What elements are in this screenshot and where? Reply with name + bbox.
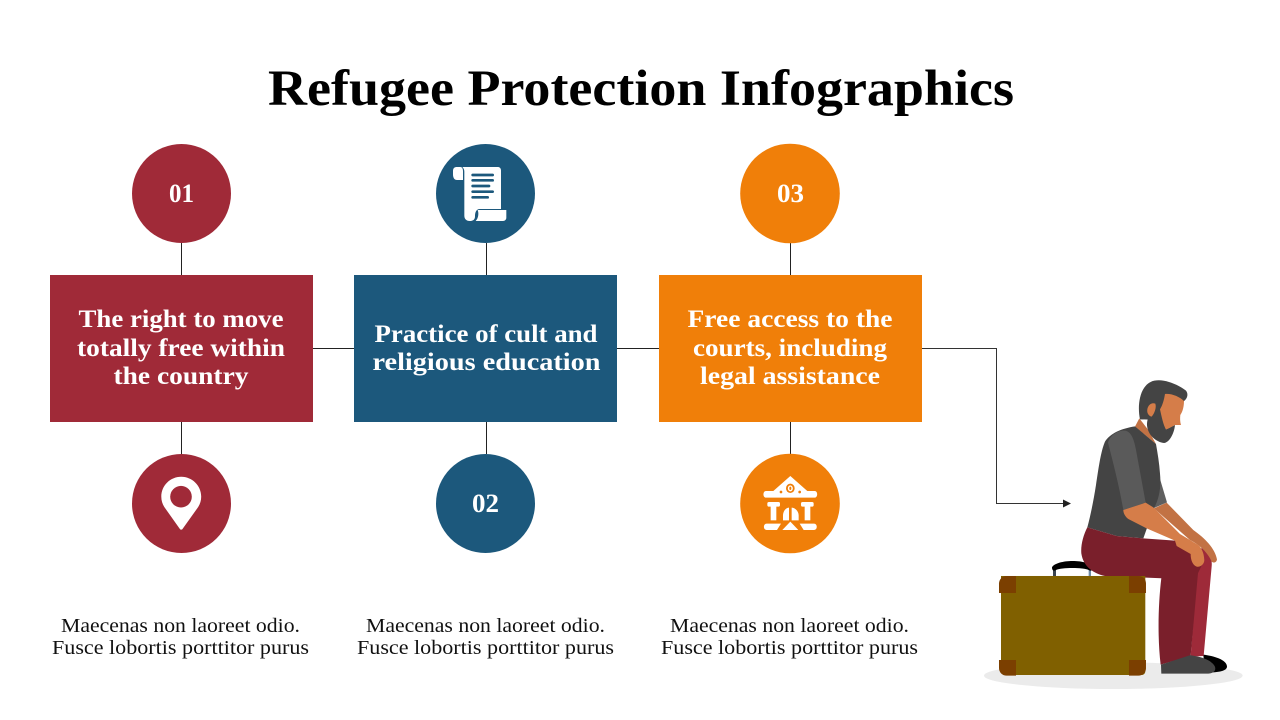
number badge 03: 03 [777, 179, 804, 208]
connector lines [182, 243, 790, 454]
near arm [1123, 503, 1204, 567]
ear [1147, 403, 1156, 417]
icon: courthouse badge [740, 454, 840, 553]
panel: religious education [354, 275, 617, 422]
panel text: access to courts: legal assistance [700, 361, 880, 390]
panel text: free movement: the country [114, 361, 249, 390]
arrow: to refugee figure [922, 348, 1071, 508]
suitcase handle [1052, 561, 1093, 577]
number badge 02: 02 [472, 489, 499, 518]
near shoe [1161, 655, 1215, 674]
face [1160, 394, 1184, 429]
ground shadow [984, 662, 1243, 689]
near leg [1081, 527, 1204, 665]
suitcase corners [999, 576, 1146, 676]
panel: access to courts [659, 275, 922, 422]
near sleeve [1108, 431, 1146, 510]
illustration: refugee seated on suitcase [984, 380, 1243, 689]
panel: free movement [50, 275, 313, 422]
text block: column 1 caption: Fusce lobortis porttitor purus [52, 637, 309, 659]
number badge 02 [436, 454, 535, 553]
number badge 01 [132, 144, 231, 243]
text block: column 3 caption: Fusce lobortis porttitor purus [661, 637, 918, 659]
text block: column 3 caption: Maecenas non laoreet odio. [670, 615, 909, 637]
title: Refugee Protection Infographics [268, 61, 1014, 117]
number badge 01: 01 [169, 179, 194, 208]
suitcase body [1001, 580, 1145, 675]
icon: scroll badge [436, 144, 535, 243]
neck [1135, 418, 1156, 444]
far sleeve [1154, 477, 1167, 508]
panel text: free movement: The right to move [78, 304, 284, 333]
number badge 03 [740, 144, 840, 243]
panel text: access to courts: courts, including [693, 333, 887, 362]
far leg [1191, 547, 1212, 657]
hair [1139, 380, 1187, 420]
far shoe [1203, 655, 1227, 673]
text block: column 1 caption: Maecenas non laoreet odio. [61, 615, 300, 637]
panel text: access to courts: Free access to the [688, 304, 892, 333]
man [1081, 380, 1227, 674]
panel text: religious education: religious education [372, 347, 600, 376]
text block: column 2 caption: Fusce lobortis porttitor purus [357, 637, 614, 659]
icon: location pin badge [132, 454, 231, 553]
far arm [1154, 503, 1217, 563]
text block: column 2 caption: Maecenas non laoreet odio. [366, 615, 605, 637]
panel text: free movement: totally free within [77, 333, 285, 362]
torso [1087, 426, 1160, 538]
beard [1147, 409, 1175, 443]
panel text: religious education: Practice of cult and [374, 319, 598, 348]
